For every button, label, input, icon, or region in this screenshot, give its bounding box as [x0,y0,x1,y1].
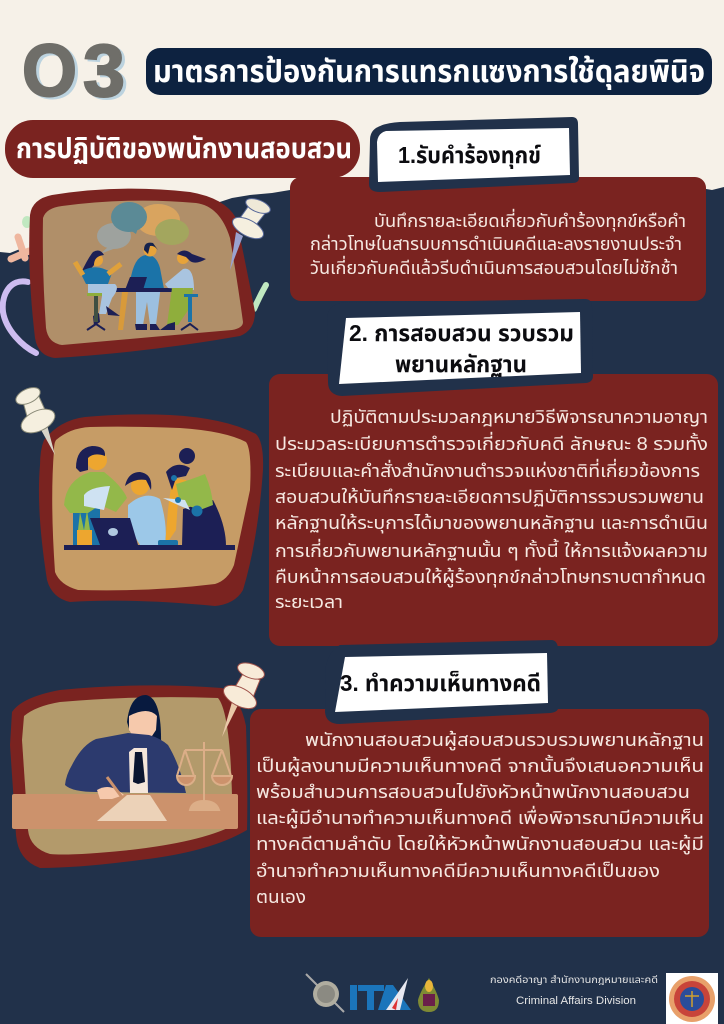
decorative doodles [3,216,266,353]
title banner: มาตรการป้องกันการแทรกแซงการใช้ดุลยพินิจ [153,54,705,90]
panel 2: investigation text: หลักฐานให้ระบุการได้มาของพยานหลักฐาน และการดำเนิน [275,513,708,534]
label 3: case opinion: 3. ทำความเห็นทางคดี [340,670,541,696]
right person [177,252,189,264]
label 2: investigation: พยานหลักฐาน [395,351,527,377]
people at table [75,243,206,330]
label 1: receive complaint: 1.รับคำร้องทุกข์ [398,142,541,169]
scales of justice [177,742,232,810]
panel 3: case opinion text: และผู้มีอำนาจทำความเห็นทางคดี เพื่อพิจารณามีความเห็น [256,805,704,830]
panel 3: case opinion text [250,709,709,937]
big number 03 [22,29,128,114]
panel 3: case opinion text: ตนเอง [256,887,306,907]
panel 2: investigation text [269,374,718,646]
speech bubbles [97,202,189,254]
right person [182,500,226,546]
desk [12,794,238,829]
center person [136,285,161,325]
frame: maroon blob [29,189,255,358]
footer text: กองคดีอาญา สำนักงานกฎหมายและคดี [490,974,658,986]
panel 3: case opinion text: ทางคดีตามลำดับ โดยให้หัวหน้าพนักงานสอบสวน และผู้มี [256,834,704,856]
panel 3: case opinion text: อำนาจทำความเห็นทางคดีมีความเห็นทางคดีเป็นของ [256,861,660,881]
logo: sword medallion [306,974,344,1012]
frame: khaki inner [22,697,232,854]
logo: police emblem [418,978,439,1012]
left person [88,284,117,314]
table [64,545,235,550]
panel 1: complaint text: กล่าวโทษในสารบบการดำเนินคดีและลงรายงานประจำ [310,234,682,254]
footer text: Criminal Affairs Division [516,995,636,1007]
panel 3: case opinion text: พร้อมสำนวนการสอบสวนไปยังหัวหน้าพนักงานสอบสวน [256,782,690,802]
section heading pill: การปฏิบัติของพนักงานสอบสวน [16,133,352,164]
center person [128,496,166,545]
laptop [90,518,138,545]
pin 2 [13,384,59,455]
panel 2: investigation text: การเกี่ยวกับพยานหลักฐานนั้น ๆ ทั้งนี้ ให้การแจ้งผลความ [275,538,708,561]
illustration 1: team discussion [29,189,255,358]
logo: ITA [350,978,411,1010]
label 1: receive complaint [369,117,579,192]
investigator [65,695,186,800]
illustration 2: colleagues at laptop [39,414,263,606]
frame: tan inner [52,427,250,590]
panel 2: investigation text: คืบหน้าการสอบสวนให้ผู้ร้องทุกข์กล่าวโทษทราบตากำหนด [275,567,706,589]
label 2: investigation [327,299,593,396]
panel 3: case opinion text: พนักงานสอบสวนผู้สอบสวนรวบรวมพยานหลักฐาน [305,730,704,752]
frame: maroon blob [39,414,263,606]
panel 3: case opinion text: เป็นผู้ลงนามมีความเห็นทางคดี จากนั้นจึงเสนอความเห็น [256,754,704,778]
section heading pill [5,120,360,178]
panel 1: complaint text: วันเกี่ยวกับคดีแล้วรีบดำเนินการสอบสวนโดยไม่ชักช้า [310,255,678,278]
big number 03: O [22,29,77,112]
label 3: case opinion [325,640,558,724]
people and laptop [64,446,235,550]
panel 2: investigation text: ประมวลระเบียบการตำรวจเกี่ยวกับคดี ลักษณะ 8 รวมทั้ง [275,431,708,454]
panel 2: investigation text: สอบสวนให้บันทึกรายละเอียดการปฏิบัติการรวบรวมพยาน [275,487,704,507]
panel 1: complaint text [290,177,706,301]
frame: maroon blob [10,685,247,868]
label 2: investigation: 2. การสอบสวน รวบรวม [349,320,574,346]
panel 2: investigation text: ระยะเวลา [275,592,343,612]
pin 3 [220,660,267,737]
logo: Criminal Affairs Division seal [666,973,718,1024]
panel 1: complaint text: บันทึกรายละเอียดเกี่ยวกับคำร้องทุกข์หรือคำ [374,208,686,232]
illustration 3: investigator with scales [10,685,247,868]
big number 03: O [25,31,80,114]
panel 2: investigation text: ปฏิบัติตามประมวลกฎหมายวิธีพิจารณาความอาญา [330,407,708,427]
left person [73,505,100,546]
big number 03: 3 [86,31,128,114]
panel 2: investigation text: ระเบียบและคำสั่งสำนักงานตำรวจแห่งชาติที่เกี่ยวข้องการ [275,458,700,481]
footer text [490,974,658,1007]
paper on desk [97,795,167,821]
frame: tan inner [43,201,243,345]
background: torn cream paper [0,0,724,253]
pin 1 [229,196,272,270]
big number 03: 3 [83,29,125,112]
